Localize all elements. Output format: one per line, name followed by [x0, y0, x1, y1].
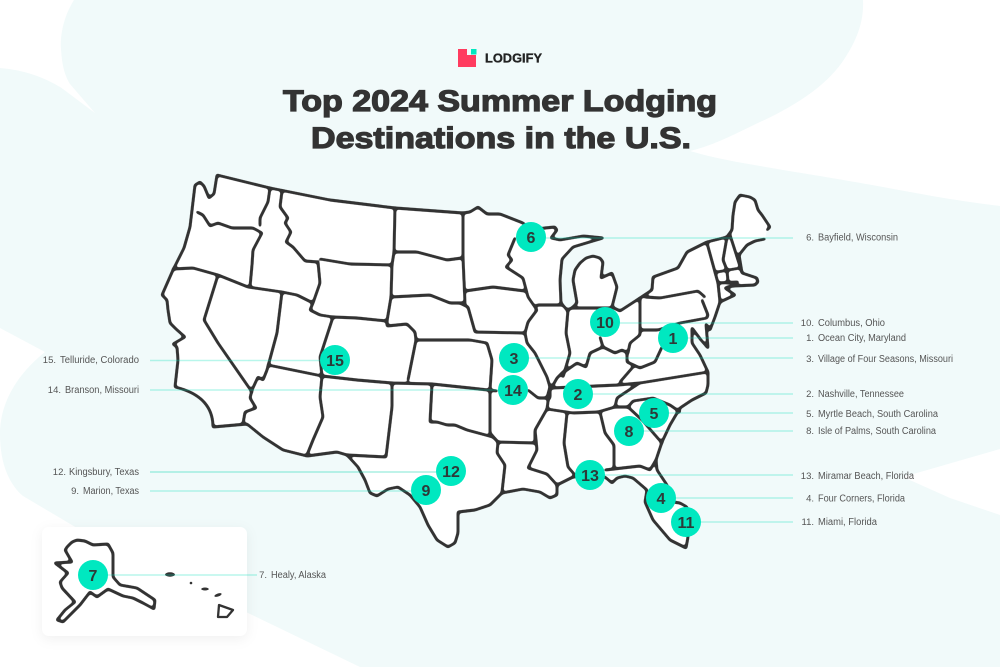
destination 3: Village of Four Seasons, Missouri: Village of Four Seasons, Missouri	[818, 354, 953, 365]
destination 15: Telluride, Colorado: 15.	[43, 355, 56, 366]
title	[283, 85, 717, 155]
destination 8: Isle of Palms, South Carolina: 8	[625, 424, 634, 441]
destination 14: Branson, Missouri: 14	[504, 383, 522, 400]
destination 11: Miami, Florida: Miami, Florida	[818, 517, 877, 528]
destination 11: Miami, Florida: 11	[678, 515, 695, 532]
destination 4: Four Corners, Florida	[646, 483, 905, 513]
destination 4: Four Corners, Florida: 4.	[806, 494, 814, 504]
logo: Lodgify: LODGIFY	[485, 52, 543, 66]
destination 10: Columbus, Ohio: Columbus, Ohio	[818, 318, 885, 329]
destination 14: Branson, Missouri	[48, 375, 528, 405]
destination 9: Marion, Texas: 9	[422, 483, 431, 500]
destination 3: Village of Four Seasons, Missouri: 3	[510, 351, 519, 368]
destination 6: Bayfield, Wisconsin: Bayfield, Wisconsin	[818, 232, 898, 244]
title: Top 2024 Summer Lodging	[283, 85, 717, 118]
destination 15: Telluride, Colorado: 15	[326, 353, 344, 370]
destination 2: Nashville, Tennessee	[563, 379, 904, 409]
destination 5: Myrtle Beach, South Carolina: 5.	[806, 409, 814, 420]
destination 13: Miramar Beach, Florida	[575, 460, 914, 490]
Alaska outline	[55, 540, 155, 622]
destination 13: Miramar Beach, Florida: 13	[581, 468, 599, 485]
destination 14: Branson, Missouri: Branson, Missouri	[65, 385, 139, 396]
destination 13: Miramar Beach, Florida: Miramar Beach, Florida	[818, 471, 914, 482]
Hawaii islands	[165, 572, 233, 617]
destination 10: Columbus, Ohio: 10	[596, 315, 614, 332]
destination 5: Myrtle Beach, South Carolina: Myrtle Beach, South Carolina	[818, 409, 938, 420]
destination 12: Kingsbury, Texas	[53, 456, 466, 486]
panel: Alaska and Hawaii inset	[42, 527, 247, 636]
destination 9: Marion, Texas	[71, 475, 441, 505]
destination 15: Telluride, Colorado: Telluride, Colorado	[60, 355, 139, 366]
destination 10: Columbus, Ohio	[590, 307, 885, 337]
destination 12: Kingsbury, Texas: 12	[442, 464, 460, 481]
destination 7: Healy, Alaska: 7.	[259, 570, 267, 581]
destination 8: Isle of Palms, South Carolina	[614, 416, 936, 446]
destination 14: Branson, Missouri: 14.	[48, 385, 61, 396]
destination 5: Myrtle Beach, South Carolina	[639, 398, 938, 428]
destination 13: Miramar Beach, Florida: 13.	[801, 471, 814, 482]
destination 1: Ocean City, Maryland: 1	[669, 331, 678, 348]
destination 11: Miami, Florida	[671, 507, 877, 537]
map: contiguous United States	[162, 175, 770, 548]
destination 6: Bayfield, Wisconsin: 6	[527, 230, 536, 247]
destination 5: Myrtle Beach, South Carolina: 5	[650, 406, 659, 423]
destination 4: Four Corners, Florida: Four Corners, Florida	[818, 494, 905, 504]
destination 8: Isle of Palms, South Carolina: Isle of Palms, South Carolina	[818, 426, 936, 437]
logo: Lodgify	[458, 49, 543, 67]
outline and state borders	[162, 175, 770, 548]
destination 3: Village of Four Seasons, Missouri	[499, 343, 953, 373]
destination 3: Village of Four Seasons, Missouri: 3.	[806, 354, 814, 365]
title: Destinations in the U.S.	[311, 122, 691, 155]
destination 12: Kingsbury, Texas: 12.	[53, 467, 66, 478]
destination 7: Healy, Alaska: Healy, Alaska	[271, 570, 326, 581]
destination 7: Healy, Alaska	[78, 560, 326, 590]
destination 15: Telluride, Colorado	[43, 345, 350, 375]
destination 9: Marion, Texas: 9.	[71, 486, 79, 497]
destination 8: Isle of Palms, South Carolina: 8.	[806, 426, 814, 437]
destination 1: Ocean City, Maryland: Ocean City, Maryland	[818, 333, 906, 344]
destination 2: Nashville, Tennessee: 2.	[806, 389, 814, 400]
land fill	[162, 175, 770, 548]
destination 10: Columbus, Ohio: 10.	[801, 318, 814, 329]
destination 2: Nashville, Tennessee: Nashville, Tennessee	[818, 389, 904, 400]
destination 1: Ocean City, Maryland: 1.	[806, 333, 814, 344]
destination 12: Kingsbury, Texas: Kingsbury, Texas	[69, 467, 139, 478]
destination 4: Four Corners, Florida: 4	[657, 491, 666, 508]
destination 11: Miami, Florida: 11.	[801, 517, 814, 528]
destination 7: Healy, Alaska: 7	[89, 568, 98, 585]
destination 6: Bayfield, Wisconsin	[516, 222, 898, 252]
destination 9: Marion, Texas: Marion, Texas	[83, 486, 139, 497]
destination 2: Nashville, Tennessee: 2	[574, 387, 583, 404]
destination 1: Ocean City, Maryland	[658, 323, 906, 353]
destination 6: Bayfield, Wisconsin: 6.	[806, 232, 814, 244]
